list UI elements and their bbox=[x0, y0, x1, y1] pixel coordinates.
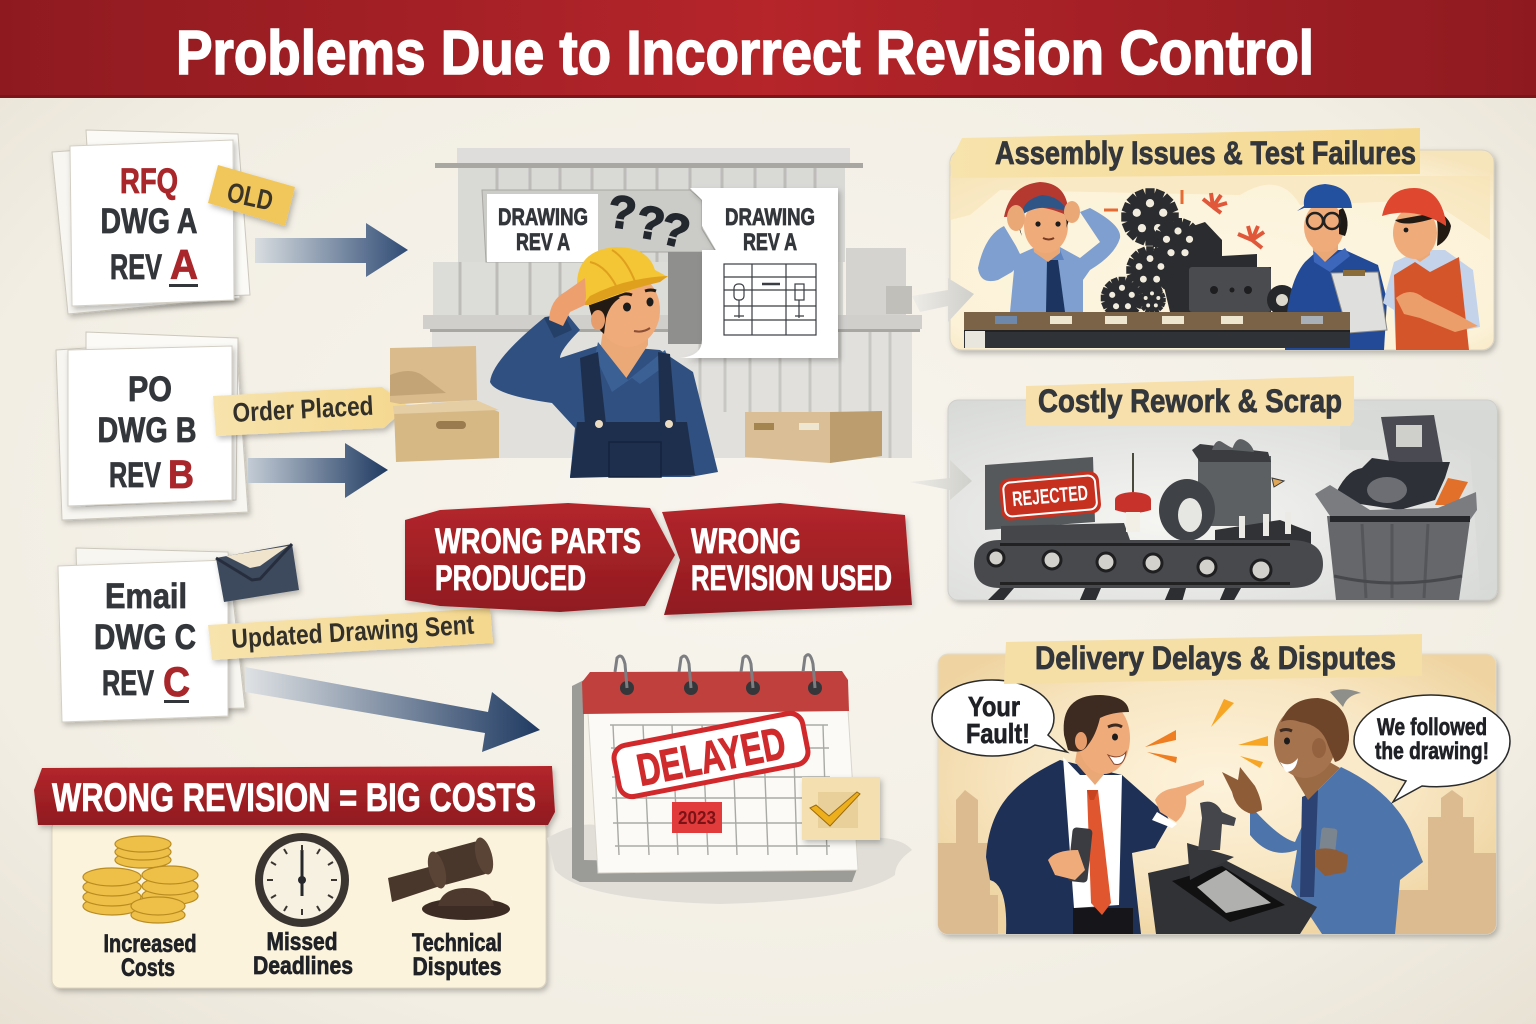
arrow: from RFQ bbox=[255, 223, 408, 277]
stamp: rejected: REJECTED bbox=[1011, 482, 1089, 511]
icon: envelope bbox=[216, 544, 299, 602]
text: increased: Increased bbox=[104, 930, 196, 958]
tag: OLD: OLD bbox=[224, 177, 276, 216]
hard hat bbox=[577, 247, 668, 305]
banner: wrong parts produced bbox=[405, 503, 675, 612]
pointing hand bbox=[1155, 780, 1204, 822]
document: PO DWG B REV B: DWG B bbox=[98, 411, 196, 450]
title tag: delivery delays bbox=[1004, 634, 1422, 684]
document: Email DWG C REV C: DWG C bbox=[94, 618, 196, 657]
title: Problems Due to Incorrect Revision Control bbox=[176, 19, 1314, 88]
tag: Order Placed bbox=[213, 387, 408, 436]
date box: 2023 bbox=[678, 808, 716, 828]
document: PO DWG B REV B bbox=[56, 332, 248, 520]
document: Email DWG C REV C: REV bbox=[102, 664, 154, 703]
document: PO DWG B REV B: REV bbox=[109, 456, 161, 495]
drawing card: left: REV A bbox=[516, 229, 570, 256]
panel: delivery delays bbox=[932, 634, 1510, 934]
title tag: assembly issues: Assembly Issues & Test Failures bbox=[995, 135, 1416, 171]
city skyline bbox=[938, 790, 1496, 934]
table bbox=[964, 312, 1350, 348]
stamp: delayed bbox=[612, 711, 810, 800]
person: engineer confused bbox=[978, 182, 1120, 312]
machine and gears bbox=[1101, 188, 1297, 319]
clipped scene bbox=[950, 176, 1490, 350]
hand on helmet bbox=[549, 278, 586, 326]
calendar bbox=[547, 655, 912, 904]
factory background bbox=[423, 148, 922, 458]
icon: gavel bbox=[388, 836, 510, 920]
question marks: ??? bbox=[605, 184, 695, 259]
drawing card: right: DRAWING bbox=[725, 204, 815, 231]
machine on table bbox=[1148, 802, 1317, 934]
document: RFQ DWG A REV A: A bbox=[170, 241, 198, 288]
header banner bbox=[0, 0, 1536, 98]
stamp: delayed: DELAYED bbox=[633, 717, 790, 796]
arrow: to assembly panel bbox=[912, 278, 974, 322]
drawing card: left: DRAWING bbox=[498, 204, 588, 231]
tag: Updated Drawing Sent: Updated Drawing Sent bbox=[231, 610, 475, 654]
tag: OLD bbox=[208, 165, 295, 226]
clipped scene bbox=[938, 689, 1496, 934]
arrow: from email bbox=[245, 667, 540, 752]
speech bubble: we followed the drawing bbox=[1354, 695, 1510, 802]
text: technical: Technical bbox=[412, 929, 502, 957]
speech bubble: your fault: Fault! bbox=[966, 718, 1030, 749]
document: RFQ DWG A REV A bbox=[52, 130, 250, 314]
document: Email DWG C REV C: C bbox=[163, 658, 190, 705]
document: PO DWG B REV B: B bbox=[168, 453, 194, 497]
technical drawing bbox=[724, 264, 816, 335]
person: worker in orange vest bbox=[1382, 188, 1480, 350]
document: Email DWG C REV C: Email bbox=[105, 577, 187, 616]
cardboard box right bbox=[745, 411, 882, 463]
banner: wrong revision used: WRONG bbox=[691, 522, 801, 561]
icon: clock bbox=[255, 833, 349, 927]
person: man in suit left bbox=[986, 695, 1204, 934]
title tag: costly rework: Costly Rework & Scrap bbox=[1038, 383, 1342, 419]
speech bubble: your fault: Your bbox=[968, 691, 1020, 722]
person: engineer with clipboard bbox=[1285, 184, 1387, 350]
drawing card: right bbox=[680, 188, 838, 358]
title tag: assembly issues bbox=[950, 128, 1420, 178]
banner: wrong revision used bbox=[662, 503, 912, 615]
text: disputes: Disputes bbox=[412, 953, 502, 981]
banner: wrong parts produced: WRONG PARTS bbox=[435, 522, 641, 561]
person: man in blue right bbox=[1222, 689, 1423, 934]
pointing hand bbox=[1222, 767, 1262, 814]
speech bubble: we followed the drawing: the drawing! bbox=[1375, 738, 1489, 765]
document: Email DWG C REV C bbox=[58, 548, 245, 722]
scrap bin bbox=[1315, 415, 1477, 600]
speech bubble: we followed the drawing: We followed bbox=[1377, 714, 1487, 741]
tag: Order Placed: Order Placed bbox=[232, 391, 374, 428]
banner: wrong revision big costs bbox=[34, 766, 555, 825]
text: missed: Missed bbox=[266, 928, 338, 956]
banner: wrong revision used: REVISION USED bbox=[691, 559, 892, 598]
title tag: costly rework bbox=[1026, 376, 1354, 426]
panel: assembly issues bbox=[950, 128, 1494, 350]
banner: wrong revision big costs: WRONG REVISION = BIG COSTS bbox=[52, 776, 536, 820]
conveyor machine bbox=[974, 439, 1323, 602]
icon: gold coins bbox=[83, 836, 198, 923]
calendar grid bbox=[610, 725, 830, 855]
document: PO DWG B REV B: PO bbox=[128, 370, 172, 409]
clipped scene bbox=[974, 410, 1497, 602]
arrow: from PO bbox=[248, 443, 388, 498]
calendar rings bbox=[615, 655, 822, 695]
document: RFQ DWG A REV A: RFQ bbox=[120, 162, 178, 201]
sticky note with check bbox=[802, 777, 880, 840]
arrow: to rework panel bbox=[910, 460, 972, 500]
title tag: delivery delays: Delivery Delays & Disputes bbox=[1035, 640, 1396, 676]
stamp: rejected bbox=[998, 471, 1102, 521]
text: costs: Costs bbox=[121, 954, 175, 982]
worker bbox=[490, 247, 718, 478]
speech bubble: your fault bbox=[932, 680, 1067, 756]
drawing card: right: REV A bbox=[743, 229, 797, 256]
cardboard boxes left bbox=[390, 346, 499, 462]
panel: costly rework bbox=[948, 376, 1497, 602]
date box bbox=[672, 802, 722, 833]
text: deadlines: Deadlines bbox=[253, 952, 353, 980]
document: RFQ DWG A REV A: REV bbox=[110, 248, 162, 287]
drawing card: left bbox=[482, 184, 716, 344]
panel: costs bbox=[52, 820, 546, 988]
shout marks bbox=[1145, 699, 1268, 768]
banner: wrong parts produced: PRODUCED bbox=[435, 559, 586, 598]
document: RFQ DWG A REV A: DWG A bbox=[100, 202, 198, 241]
